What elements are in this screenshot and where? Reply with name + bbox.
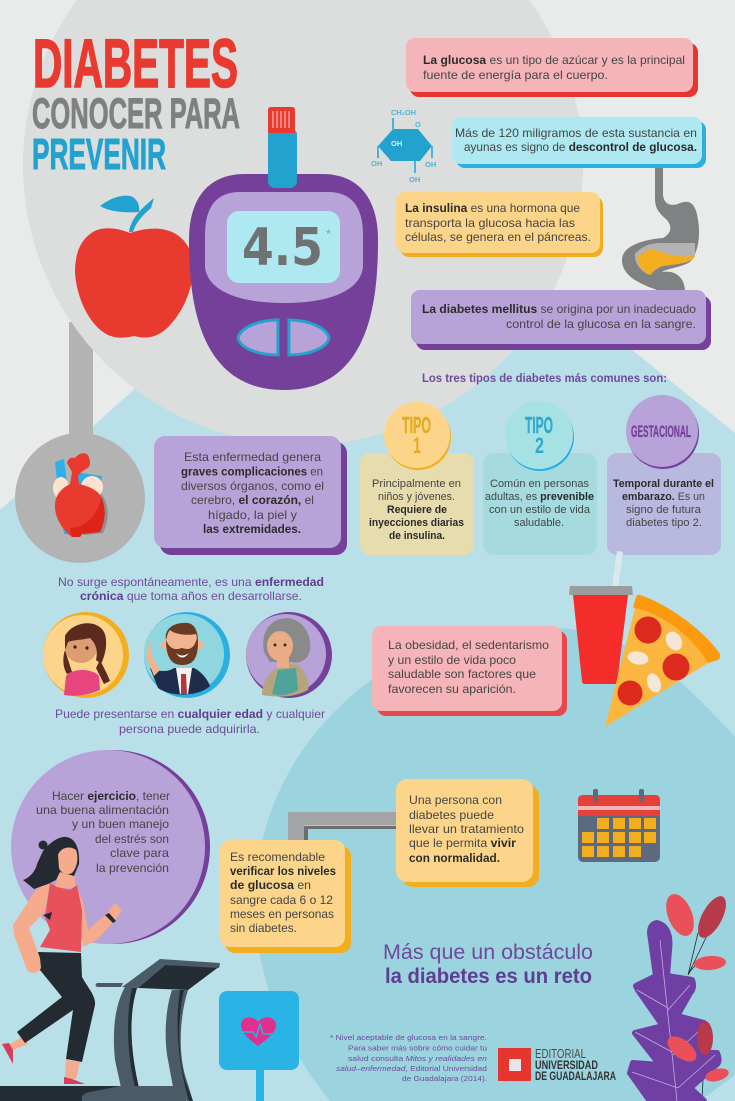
- panel: obesidad: La obesidad, el sedentarismo: [388, 638, 549, 652]
- panel: obesidad: favorecen su aparición.: [388, 682, 516, 696]
- panel: complicaciones: cerebro, el corazón, el: [191, 493, 314, 507]
- card: gestacional: embarazo. Es un: [622, 491, 705, 503]
- card: tipo 1: Requiere de: [387, 504, 447, 516]
- panel: complicaciones: [154, 436, 347, 555]
- title: DIABETES: [33, 25, 238, 102]
- panel: insulina: transporta la glucosa hacia las: [405, 216, 575, 230]
- footnote: * Nivel aceptable de glucosa en la sangre.: [330, 1033, 487, 1042]
- panel: verificar niveles: meses en personas: [230, 907, 334, 921]
- footnote: salud–enfermedad, Editorial Universidad: [336, 1064, 487, 1073]
- footnote: salud consulta Mitos y realidades en: [348, 1054, 487, 1063]
- panel: complicaciones: graves complicaciones en: [181, 464, 323, 478]
- title: CONOCER PARA: [32, 90, 240, 138]
- card: tipo 2: 2: [535, 433, 544, 458]
- logo: Editorial Universidad de Guadalajara: [498, 1047, 616, 1083]
- panel: tratamiento: Una persona con: [409, 793, 502, 807]
- panel: descontrol de glucosa: ayunas es signo de descontrol de glucosa.: [464, 140, 697, 154]
- large grey circle: [23, 0, 583, 445]
- panel: obesidad: [372, 626, 567, 716]
- icon: treadmill: [0, 959, 220, 1101]
- closing message: Más que un obstáculo: [383, 941, 593, 964]
- text: enfermedad crónica: crónica que toma años en desarrollarse.: [80, 589, 302, 603]
- text: cualquier edad: persona puede adquirirla.: [119, 722, 260, 736]
- card: tipo 1: [360, 402, 474, 555]
- card: tipo 1: de insulina.: [389, 530, 445, 542]
- icon: pizza slice: [605, 595, 720, 727]
- panel: complicaciones: las extremidades.: [203, 522, 301, 536]
- text: enfermedad crónica: [58, 575, 324, 603]
- connector: yellow panels: [288, 812, 396, 840]
- icon: glucose meter: *: [326, 227, 331, 241]
- panel: prevención circle: Hacer ejercicio, tener: [52, 789, 170, 803]
- title: [32, 25, 240, 179]
- panel: descontrol de glucosa: [452, 117, 706, 168]
- footnote: de Guadalajara (2014).: [402, 1074, 487, 1083]
- panel: glucosa: [406, 38, 698, 97]
- card: gestacional: diabetes tipo 2.: [626, 517, 702, 529]
- icon: glucose molecule: CH₂OH: [391, 108, 416, 117]
- panel: prevención circle: [11, 750, 210, 944]
- panel: glucosa: fuente de energía para el cuerpo.: [423, 68, 608, 82]
- icon: glucose molecule: OH: [391, 139, 402, 148]
- icon: decorative plant: [630, 890, 732, 1101]
- panel: tratamiento: diabetes puede: [409, 808, 494, 822]
- panel: verificar niveles: sangre cada 6 o 12: [230, 893, 333, 907]
- icon: apple: [75, 196, 193, 338]
- icon: glucose molecule: [371, 108, 436, 184]
- panel: insulina: [396, 192, 603, 257]
- card: tipo 1: niños y jóvenes.: [378, 491, 455, 503]
- footnote: [330, 1033, 487, 1083]
- text: cualquier edad: Puede presentarse en cualquier edad y cualquier: [55, 707, 325, 721]
- panel: glucosa: La glucosa es un tipo de azúcar y es la principal: [423, 53, 685, 67]
- closing message: [383, 941, 593, 988]
- panel: verificar niveles: de glucosa en: [230, 878, 311, 892]
- panel: diabetes mellitus: La diabetes mellitus se origina por un inadecuado: [422, 302, 696, 316]
- panel: prevención circle: una buena alimentación: [36, 803, 169, 817]
- panel: prevención circle: y un buen manejo: [72, 817, 169, 831]
- icon: glucose molecule: O: [415, 120, 421, 129]
- connector: apple to heart: [69, 322, 93, 437]
- card: tipo 1: 1: [413, 433, 421, 458]
- footnote: Para saber más sobre cómo cuidar tu: [348, 1044, 487, 1052]
- card: tipo 2: [483, 401, 597, 555]
- panel: prevención circle: la prevención: [96, 861, 169, 875]
- panel: tratamiento: llevar un tratamiento: [409, 822, 524, 836]
- panel: verificar niveles: Es recomendable: [230, 850, 325, 864]
- panel: obesidad: y un estilo de vida poco: [388, 653, 516, 667]
- panel: complicaciones: Esta enfermedad genera: [184, 450, 321, 464]
- panel: tratamiento: con normalidad.: [409, 851, 500, 865]
- panel: prevención circle: del estrés son: [95, 832, 169, 846]
- card: tipo 1: TIPO: [402, 412, 431, 438]
- text: cualquier edad: [55, 707, 325, 736]
- panel: obesidad: saludable son factores que: [388, 667, 536, 681]
- card: tipo 2: saludable.: [514, 517, 564, 529]
- text: enfermedad crónica: No surge espontáneamente, es una enfermedad: [58, 575, 324, 589]
- panel: descontrol de glucosa: Más de 120 miligramos de esta sustancia en: [455, 126, 697, 140]
- icon: medical sign: [219, 991, 299, 1101]
- icon: glucose molecule: OH: [371, 159, 382, 168]
- card: tipo 2: con un estilo de vida: [489, 504, 591, 516]
- card: tipo 2: adultas, es prevenible: [485, 491, 594, 503]
- card: tipo 2: Común en personas: [490, 478, 589, 490]
- panel: complicaciones: hígado, la piel y: [208, 508, 297, 522]
- panel: tratamiento: [396, 779, 539, 887]
- icon: man: [144, 612, 230, 698]
- pale blue background shape: [0, 287, 735, 1101]
- icon: glucose molecule: OH: [409, 175, 420, 184]
- card: tipo 2: TIPO: [525, 412, 553, 438]
- card: gestacional: [607, 395, 721, 555]
- card: gestacional: Temporal durante el: [613, 478, 714, 490]
- icon: heart in grey circle: [15, 433, 145, 563]
- icon: calendar: [578, 789, 660, 862]
- logo: Editorial Universidad de Guadalajara: EDITORIAL: [535, 1047, 586, 1061]
- panel: complicaciones: diversos órganos, como el: [181, 479, 324, 493]
- logo: Editorial Universidad de Guadalajara: DE GUADALAJARA: [535, 1069, 616, 1083]
- panel: verificar niveles: [220, 840, 351, 953]
- icon: straw and soda cup: [569, 551, 633, 684]
- icon: grandmother: [246, 612, 332, 698]
- panel: prevención circle: clave para: [110, 846, 169, 860]
- panel: insulina: células, se genera en el páncreas.: [405, 230, 591, 244]
- panel: diabetes mellitus: control de la glucosa en la sangre.: [506, 317, 696, 331]
- card: tipo 1: Principalmente en: [372, 478, 461, 490]
- heading: tipos de diabetes: Los tres tipos de diabetes más comunes son:: [422, 371, 667, 385]
- icon: girl: [43, 612, 129, 698]
- card: gestacional: signo de futura: [626, 504, 702, 516]
- panel: diabetes mellitus: [411, 290, 711, 350]
- icon: woman running: [2, 837, 122, 1084]
- logo: Editorial Universidad de Guadalajara: UNIVERSIDAD: [535, 1058, 598, 1072]
- darker blue background blob: [255, 627, 735, 1101]
- card: tipo 1: inyecciones diarias: [369, 517, 464, 529]
- title: PREVENIR: [32, 130, 166, 179]
- icon: glucose meter: 4.5: [242, 218, 323, 278]
- closing message: la diabetes es un reto: [385, 965, 592, 988]
- panel: tratamiento: que le permita vivir: [409, 836, 516, 850]
- icon: stomach: [622, 165, 699, 290]
- panel: verificar niveles: verificar los niveles: [230, 864, 336, 878]
- icon: glucose meter: [189, 107, 378, 390]
- panel: insulina: La insulina es una hormona que: [405, 201, 580, 215]
- icon: glucose molecule: OH: [425, 160, 436, 169]
- panel: verificar niveles: sin diabetes.: [230, 921, 297, 935]
